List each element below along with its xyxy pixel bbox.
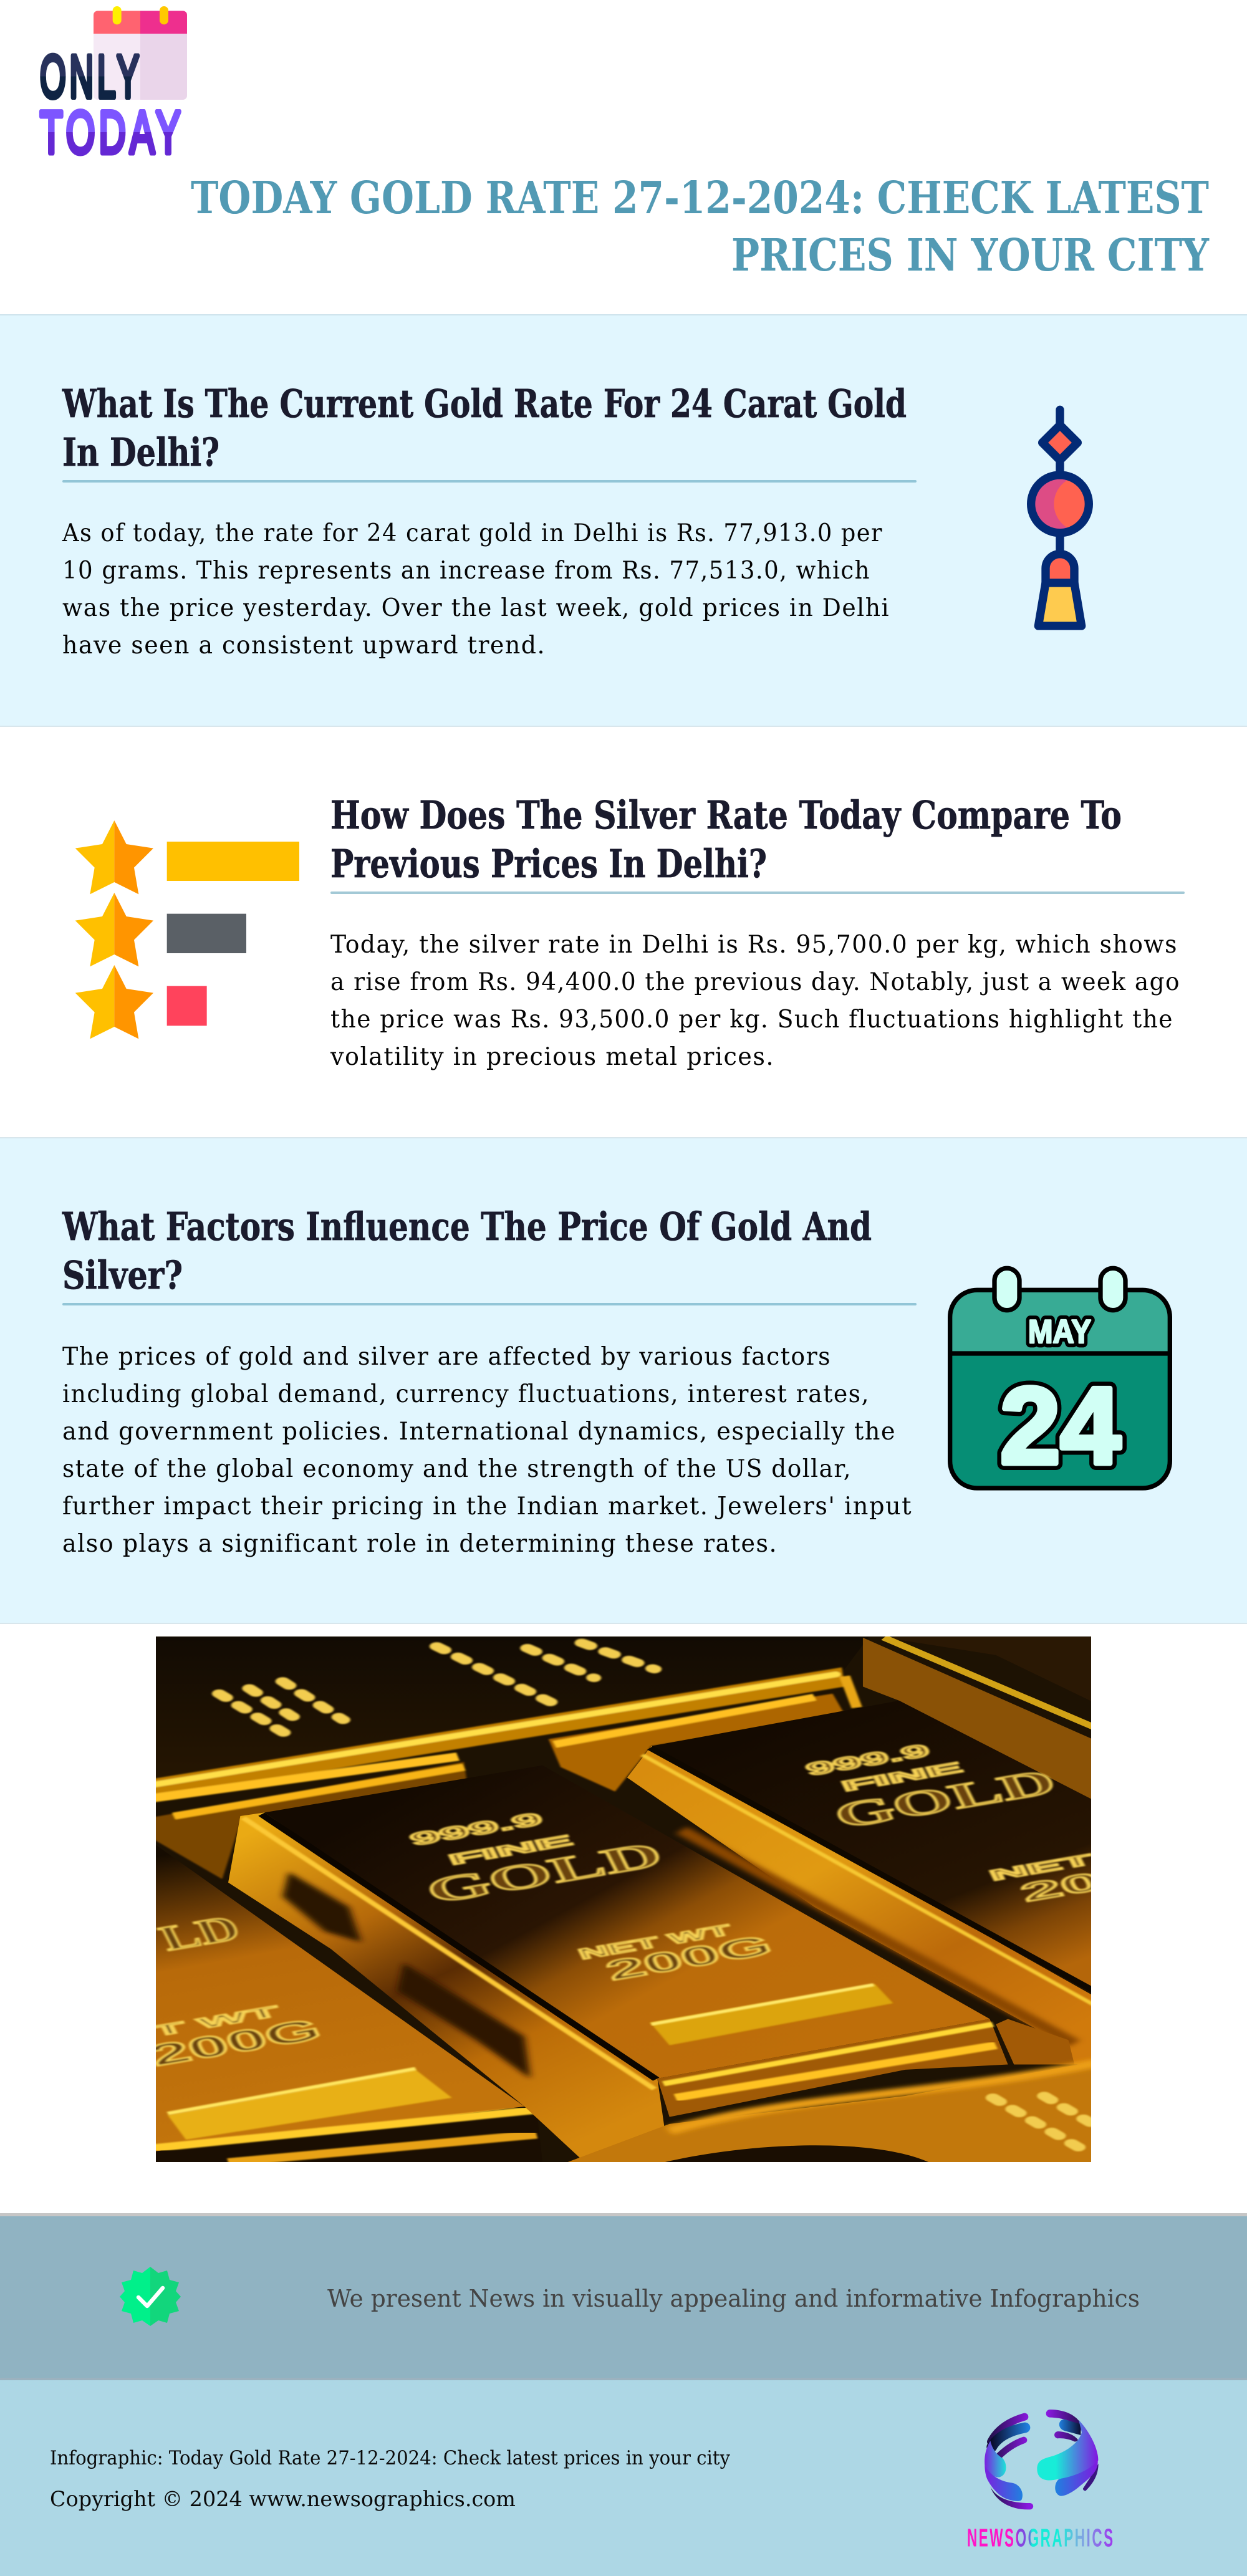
text block: factors answer: state of the global economy and the strength of the US dollar,	[62, 1455, 852, 1483]
text block: factors answer: also plays a significant role in determining these rates.	[62, 1530, 778, 1558]
panel: price factors	[0, 1137, 1247, 1624]
bar stamps: 200G	[143, 2013, 327, 2073]
bar stamps: 999.9	[802, 1741, 933, 1780]
right bar	[627, 1746, 1097, 2065]
bar stamps: FINE	[446, 1832, 575, 1868]
text block: silver rate answer: the price was Rs. 93,500.0 per kg. Such fluctuations highlight the	[330, 1006, 1173, 1034]
text block: gold rate answer: was the price yesterday. Over the last week, gold prices in Delhi	[62, 594, 890, 622]
logo word: TODAY: TODAY	[40, 99, 185, 166]
icon: calendar May 24	[949, 1268, 1171, 1488]
text block: silver rate answer: volatility in precious metal prices.	[330, 1043, 774, 1071]
heading: silver rate question	[330, 792, 1122, 887]
panel: silver rate comparison	[75, 792, 1185, 1071]
bar stamps: LD	[153, 1908, 247, 1958]
icon: calendar May 24: MAY	[1028, 1314, 1091, 1350]
bar stamps: GOLD	[827, 1762, 1063, 1836]
text block: gold rate answer: As of today, the rate for 24 carat gold in Delhi is Rs. 77,913.0 per	[62, 519, 883, 547]
logo: Newsographics	[967, 2410, 1115, 2552]
bar stamps: GOLD	[419, 1835, 670, 1911]
back left bar surface	[150, 1637, 869, 1781]
logo word: ONLY: ONLY	[40, 43, 143, 110]
text block: gold rate answer: 10 grams. This represents an increase from Rs. 77,513.0, which	[62, 557, 870, 585]
photo: gold bars	[143, 1636, 1107, 2163]
text block: gold rate answer: have seen a consistent upward trend.	[62, 632, 546, 660]
back right bar	[883, 1637, 1091, 1701]
panel: footer	[0, 2380, 1247, 2576]
heading: silver rate question: Previous Prices In Delhi?	[330, 841, 767, 887]
panel: current gold rate	[0, 314, 1247, 727]
heading: factors question	[62, 1204, 872, 1298]
icon: calendar May 24: 24	[1000, 1365, 1120, 1487]
text block: silver rate answer: Today, the silver rate in Delhi is Rs. 95,700.0 per kg, which shows	[330, 931, 1178, 959]
lower left bar	[150, 1840, 524, 2152]
lower right bar	[567, 2061, 1097, 2163]
text block: factors answer: and government policies. International dynamics, especially the	[62, 1418, 896, 1446]
text: tagline: We present News in visually appealing and informative Infographics	[327, 2285, 1140, 2312]
icon: star ratings	[75, 820, 299, 1039]
icon: calendar May 24: 24	[1000, 1365, 1120, 1487]
icon: tower ornament	[1027, 405, 1093, 630]
bar stamps: T WT	[150, 2003, 282, 2040]
center stamp bar	[650, 1984, 893, 2045]
bar stamps	[143, 1741, 1107, 2073]
bar stamps: NET	[986, 1852, 1096, 1884]
text block: gold rate answer	[62, 519, 890, 660]
text block: factors answer: including global demand, currency fluctuations, interest rates,	[62, 1380, 870, 1408]
bar stamps: FINE	[839, 1759, 965, 1795]
panel: tagline strip	[0, 2213, 1247, 2380]
title	[191, 171, 1210, 281]
center bar top surface	[264, 1766, 990, 2079]
bar stamps: 999.9	[407, 1809, 546, 1850]
text: infographic credit: Infographic: Today Gold Rate 27-12-2024: Check latest prices in your city	[50, 2447, 730, 2469]
heading: gold rate question	[62, 381, 907, 475]
heading: factors question: What Factors Influence The Price Of Gold And	[62, 1204, 872, 1249]
text block: silver rate answer	[330, 931, 1180, 1071]
heading: gold rate question: What Is The Current Gold Rate For 24 Carat Gold	[62, 381, 907, 426]
center bar front face	[657, 2019, 1008, 2117]
text block: factors answer	[62, 1343, 912, 1558]
icon: logo calendar	[94, 6, 187, 100]
logo: Newsographics: NEWSOGRAPHICS	[967, 2523, 1115, 2552]
text: copyright: Copyright © 2024 www.newsographics.com	[50, 2487, 516, 2512]
heading: gold rate question: In Delhi?	[62, 430, 219, 475]
text block: silver rate answer: a rise from Rs. 94,400.0 the previous day. Notably, just a week ago	[330, 968, 1180, 996]
bar stamps: 20	[1015, 1867, 1107, 1907]
bright edge of back bar	[150, 1668, 857, 1879]
icon: calendar May 24: MAY	[1028, 1314, 1091, 1350]
bar stamps: NET WT	[575, 1922, 734, 1963]
logo: Only Today	[40, 6, 187, 166]
text block: factors answer: further impact their pricing in the Indian market. Jewelers' input	[62, 1492, 912, 1521]
center bar side face	[228, 1812, 670, 2163]
text block: factors answer: The prices of gold and silver are affected by various factors	[62, 1343, 831, 1371]
heading: factors question: Silver?	[62, 1252, 183, 1298]
bar stamps: 200G	[600, 1930, 778, 1986]
icon: verified badge	[120, 2267, 181, 2326]
back bar stamps	[219, 1643, 1092, 2148]
